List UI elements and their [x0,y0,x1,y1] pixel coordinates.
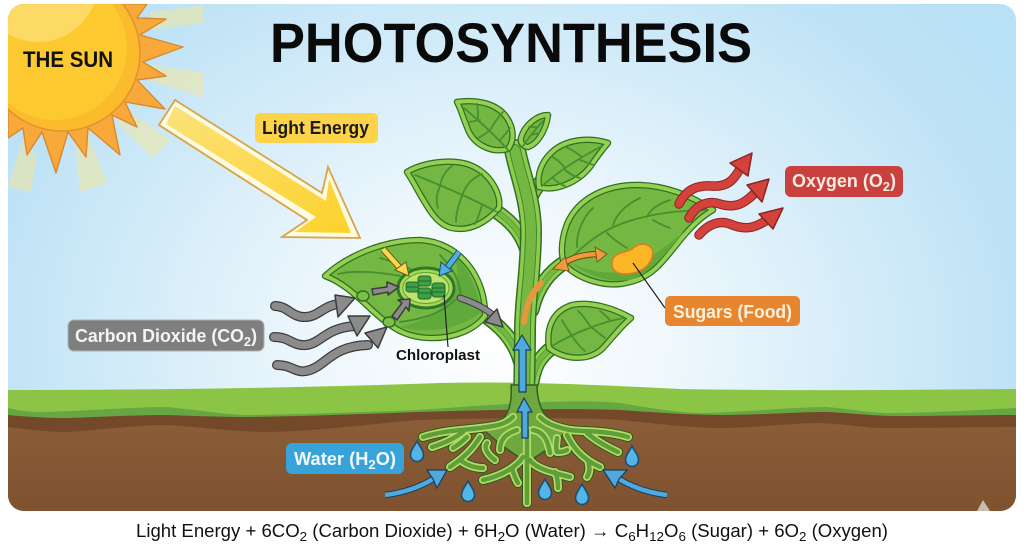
arrows: oxygen [679,153,783,235]
equation: 6 [678,529,686,544]
leaf: chloroplast leaf [325,240,485,338]
line: sugars leader [633,263,665,308]
equation: O (Water) → C [505,521,628,541]
arrows: water into roots [385,470,667,495]
label: water: 2 [368,457,376,472]
arrows: carbon dioxide [274,295,387,371]
stomata [357,291,395,327]
label: the sun: THE SUN [23,47,113,72]
label: carbon dioxide [68,320,264,351]
arrow: blue into chloroplast [439,252,459,276]
roots [423,385,628,503]
watermark triangle [977,500,990,511]
label: carbon dioxide: 2 [244,334,251,349]
label: oxygen: ) [890,171,896,191]
label: light energy [255,113,378,143]
label: oxygen [785,166,903,197]
arrows: water in stem [513,335,532,438]
soil dark band [8,409,1016,511]
leaf: upper right [539,140,608,188]
label: carbon dioxide: ) [251,326,257,346]
icon: the sun [0,0,203,192]
soil body [8,418,1016,511]
sun beams [8,5,203,192]
leaf: lower right [548,304,631,358]
equation: H [636,521,649,541]
leaf: right large [562,185,713,284]
grass [8,382,1016,415]
equation: (Sugar) + 6O [686,521,799,541]
arrow: light energy [159,100,360,238]
leaf: top [457,101,513,150]
line: chloroplast leader [444,295,448,347]
leaf: small top [521,115,548,147]
icons: water drops [410,441,638,504]
arrow: sugar transport in leaf [553,247,607,271]
label: oxygen: 2 [883,179,890,194]
label: sugars [665,296,800,326]
equation: 2 [498,529,505,544]
equation: 6 [628,529,636,544]
equation: (Oxygen) [806,521,888,541]
equation: (Carbon Dioxide) + 6H [307,521,498,541]
label: sugars: Sugars (Food) [673,302,792,322]
label: water [286,443,404,474]
arrow: gray from stoma [392,299,410,320]
grana [406,276,445,299]
label: oxygen: Oxygen (O [792,171,883,191]
panel: ground [8,382,1016,511]
sun disc [0,0,140,131]
title: PHOTOSYNTHESIS [270,11,752,74]
label: water: Water (H [294,449,367,469]
chloroplast [398,268,454,308]
equation: 2 [300,529,307,544]
arrow: sugar transport in stem [524,283,541,322]
icon: sugar bean [612,244,653,274]
equation: O [664,521,678,541]
label: light energy: Light Energy [262,118,369,138]
sun highlight [8,4,94,42]
label: chloroplast: Chloroplast [396,348,480,364]
equation: 12 [649,529,664,544]
sun inner disc [0,0,127,120]
leaf: upper left [407,162,499,229]
label: water: O) [376,449,396,469]
grass shadow [8,401,1016,418]
label: carbon dioxide: Carbon Dioxide (CO [75,326,246,346]
arrow: gray to stem [460,298,503,327]
equation: 2 [799,529,806,544]
equation: Light Energy + 6CO [136,521,295,541]
plant stem [488,150,565,415]
arrow: yellow into chloroplast [383,249,409,276]
arrow: gray into chloroplast [372,282,399,295]
sun rays [8,4,183,173]
